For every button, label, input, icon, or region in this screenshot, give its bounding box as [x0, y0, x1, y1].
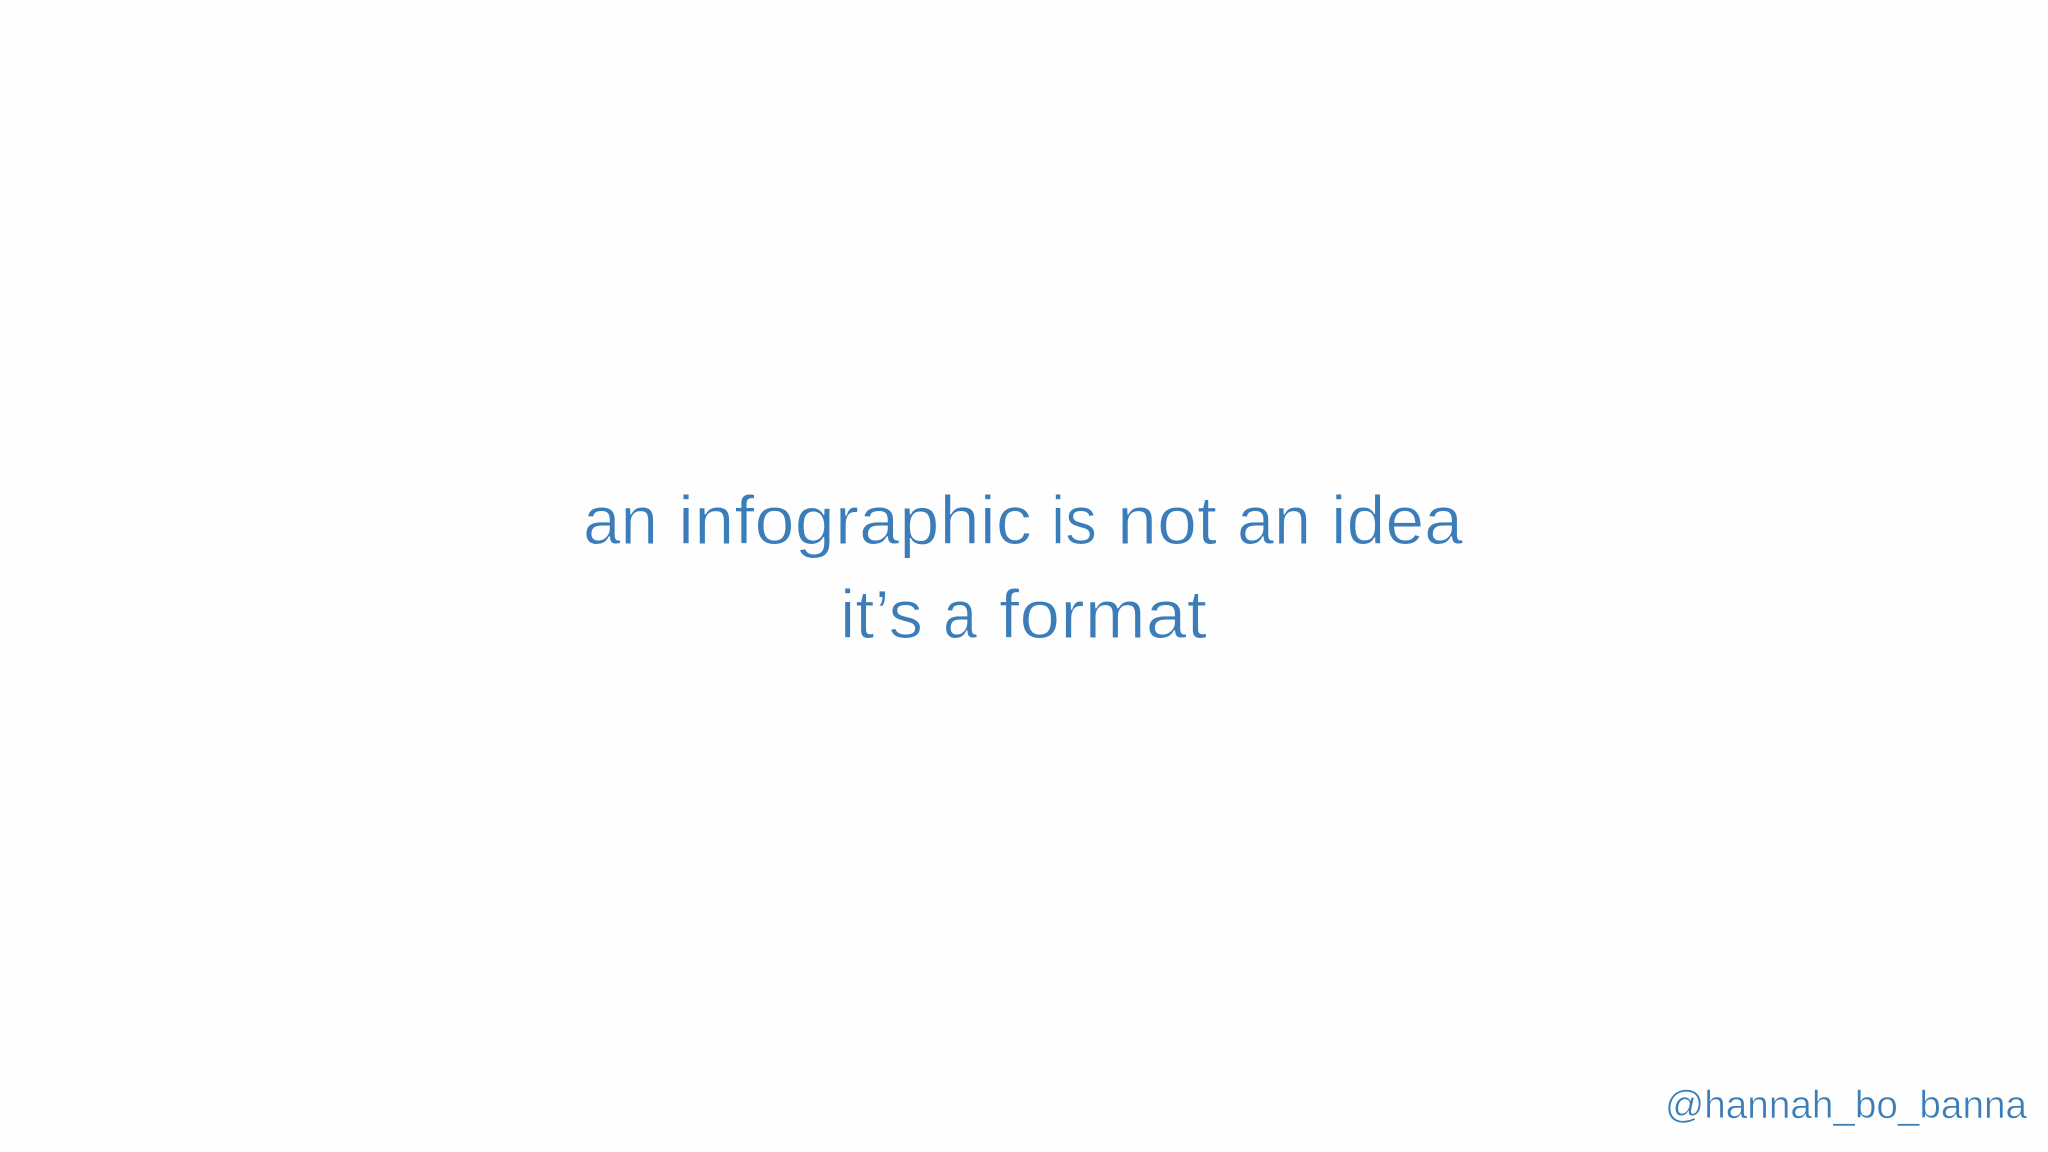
statement line 1: infographic — [678, 482, 1032, 559]
author handle: @hannah_bo_banna — [1665, 1084, 2027, 1127]
statement line 2: format — [999, 576, 1207, 653]
main statement — [583, 482, 1464, 653]
statement line 1: an — [583, 482, 658, 559]
statement line 1: not — [1117, 482, 1217, 559]
statement line 1: is — [1051, 482, 1097, 559]
statement line 1: an — [1237, 482, 1311, 559]
statement line 1: idea — [1331, 482, 1464, 559]
statement line 2: it’s — [840, 576, 923, 653]
statement line 2: a — [943, 576, 978, 653]
